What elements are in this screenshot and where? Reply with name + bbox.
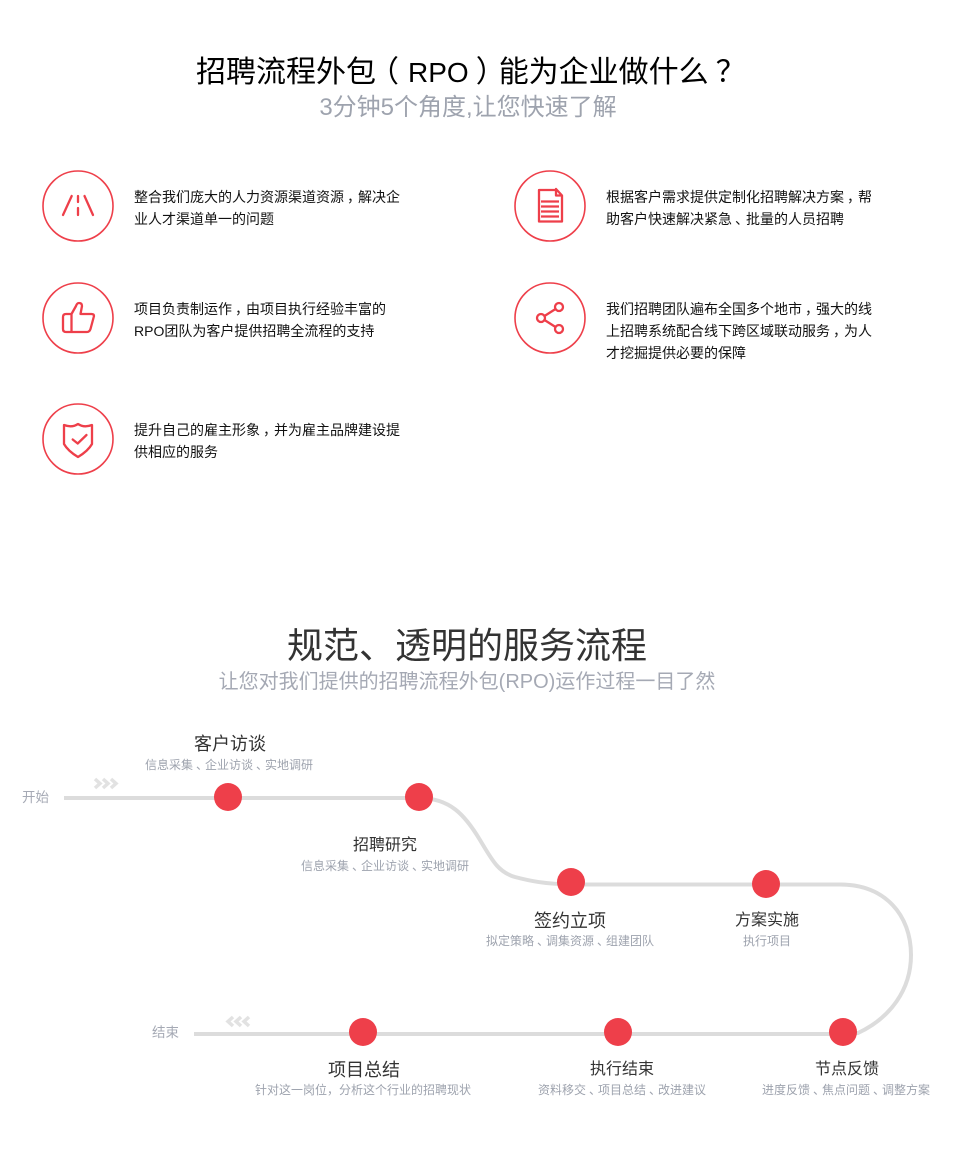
chart: process path with nodes bbox=[64, 778, 913, 1046]
step: project summary: 项目总结 bbox=[328, 1060, 400, 1080]
step: node feedback: 进度反馈、焦点问题、调整方案 bbox=[762, 1083, 930, 1097]
text: customised solution bbox=[606, 189, 872, 227]
panel: channel benefit bbox=[42, 170, 400, 242]
step: contract signing: 拟定策略、调集资源、组建团队 bbox=[486, 934, 654, 948]
text: channel benefit: 整合我们庞大的人力资源渠道资源，解决企 bbox=[134, 189, 400, 205]
title: process heading: 规范、透明的服务流程 bbox=[287, 625, 647, 666]
icon: start chevrons bbox=[95, 779, 116, 788]
step: recruitment research: 信息采集、企业访谈、实地调研 bbox=[301, 859, 469, 873]
text: channel benefit bbox=[134, 189, 400, 227]
step: execution end bbox=[538, 1060, 706, 1097]
step: project summary: 针对这一岗位，分析这个行业的招聘现状 bbox=[255, 1083, 471, 1097]
label: end: 结束 bbox=[152, 1025, 179, 1040]
step: recruitment research bbox=[301, 836, 469, 873]
step: execution end: 资料移交、项目总结、改进建议 bbox=[538, 1083, 706, 1097]
step: execution end: 执行结束 bbox=[590, 1061, 654, 1078]
text: project ownership: 项目负责制运作，由项目执行经验丰富的 bbox=[134, 301, 386, 317]
step: project summary bbox=[255, 1060, 471, 1097]
step: node feedback bbox=[762, 1060, 930, 1097]
text: nationwide team: 我们招聘团队遍布全国多个地市，强大的线 bbox=[606, 301, 872, 317]
text: project ownership bbox=[134, 301, 386, 339]
icon: road bbox=[42, 170, 114, 242]
text: nationwide team bbox=[606, 301, 872, 361]
step: customer interview: 客户访谈 bbox=[194, 734, 266, 754]
step: plan implementation: 执行项目 bbox=[743, 934, 791, 948]
text: project ownership: RPO团队为客户提供招聘全流程的支持 bbox=[134, 323, 374, 339]
text: employer brand bbox=[134, 422, 400, 460]
step: customer interview bbox=[145, 734, 313, 772]
icon: shield check bbox=[42, 403, 114, 475]
step: contract signing: 签约立项 bbox=[534, 911, 606, 931]
node markers bbox=[214, 783, 857, 1046]
panel: nationwide team bbox=[514, 282, 872, 361]
icon: document bbox=[514, 170, 586, 242]
icon: end chevrons bbox=[228, 1017, 249, 1026]
panel: project ownership bbox=[42, 282, 386, 354]
step: customer interview: 信息采集、企业访谈、实地调研 bbox=[145, 758, 313, 772]
text: employer brand: 供相应的服务 bbox=[134, 444, 218, 460]
step: plan implementation: 方案实施 bbox=[735, 912, 799, 929]
subtitle: process heading: 让您对我们提供的招聘流程外包(RPO)运作过程一目了然 bbox=[219, 671, 715, 693]
text: nationwide team: 上招聘系统配合线下跨区域联动服务，为人 bbox=[606, 323, 872, 339]
icon: share bbox=[514, 282, 586, 354]
icon: thumbs up bbox=[42, 282, 114, 354]
title: main heading: 招聘流程外包（ RPO）能为企业做什么？ bbox=[196, 56, 746, 89]
panel: customised solution bbox=[514, 170, 872, 242]
label: start: 开始 bbox=[22, 790, 49, 805]
step: recruitment research: 招聘研究 bbox=[353, 837, 417, 854]
step: plan implementation bbox=[735, 911, 799, 948]
step: node feedback: 节点反馈 bbox=[815, 1061, 879, 1078]
text: customised solution: 助客户快速解决紧急、批量的人员招聘 bbox=[606, 211, 844, 227]
text: nationwide team: 才挖掘提供必要的保障 bbox=[606, 345, 746, 361]
text: employer brand: 提升自己的雇主形象，并为雇主品牌建设提 bbox=[134, 422, 400, 438]
step: contract signing bbox=[486, 911, 654, 948]
text: customised solution: 根据客户需求提供定制化招聘解决方案，帮 bbox=[606, 189, 872, 205]
panel: employer brand bbox=[42, 403, 400, 475]
text: channel benefit: 业人才渠道单一的问题 bbox=[134, 211, 274, 227]
subtitle: main heading: 3分钟5个角度,让您快速了解 bbox=[319, 94, 617, 121]
